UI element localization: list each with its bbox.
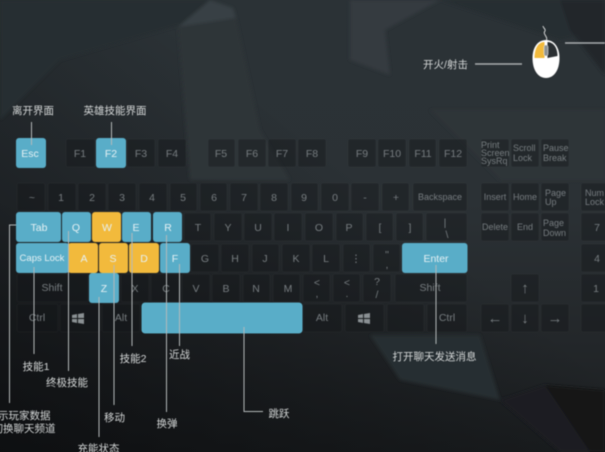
key: Q xyxy=(62,212,91,242)
keyboard: function row: F9 xyxy=(356,148,368,160)
keyboard: shift row: , xyxy=(316,288,318,300)
keyboard: function row: Screen xyxy=(481,148,510,158)
key: F xyxy=(160,243,190,273)
keyboard: shift row: / xyxy=(376,289,379,301)
keyboard: number row: Insert xyxy=(484,192,507,202)
keyboard: shift row: < xyxy=(314,277,320,289)
callout: open chat: 打开聊天发送消息 xyxy=(392,350,476,363)
keyboard: QWERTY row, inactive keys: ] xyxy=(409,222,412,234)
keyboard: QWERTY row, inactive keys: Y xyxy=(224,222,232,234)
keyboard: QWERTY row, inactive keys: I xyxy=(287,222,289,234)
icon: left windows key logo xyxy=(72,313,84,324)
keyboard: home row, inactive keys: , xyxy=(386,259,388,271)
keyboard: shift row xyxy=(17,274,605,302)
keyboard: QWERTY row, inactive keys: Page xyxy=(543,218,564,228)
keyboard: shift row: ↑ xyxy=(521,280,529,297)
keyboard: function row: F4 xyxy=(166,148,178,160)
keyboard: QWERTY row, inactive keys: \ xyxy=(446,229,449,241)
keyboard: shift row: . xyxy=(346,288,348,300)
keyboard: home row, inactive keys: G xyxy=(201,253,209,265)
keyboard: number row: 7 xyxy=(241,192,247,204)
callout: right mouse line xyxy=(565,42,605,44)
key: F: F xyxy=(172,253,178,265)
callout: skill 2 xyxy=(120,233,147,365)
callout: fire xyxy=(423,58,522,71)
key: Caps Lock xyxy=(16,243,69,273)
key: Esc xyxy=(16,138,46,168)
keyboard: function row: F5 xyxy=(215,148,227,160)
keyboard: home row, inactive keys: K xyxy=(292,253,300,265)
callout: ultimate: 终极技能 xyxy=(46,376,88,389)
keyboard: QWERTY row, inactive keys: [ xyxy=(379,222,382,234)
keyboard: number row: Lock xyxy=(585,197,605,207)
keyboard: QWERTY row, inactive keys xyxy=(184,213,605,241)
key: R: R xyxy=(164,222,172,234)
key: E xyxy=(122,212,151,242)
keyboard: function row: F8 xyxy=(306,148,318,160)
key: A: A xyxy=(80,253,88,265)
key: E: E xyxy=(132,222,140,234)
key: S xyxy=(99,243,128,273)
keyboard: shift row: ? xyxy=(374,276,380,288)
keyboard: number row: Home xyxy=(513,192,537,202)
keyboard: function row: Break xyxy=(543,153,567,163)
key: F2 xyxy=(96,138,126,168)
keyboard: home row, inactive keys: " xyxy=(385,249,389,261)
keyboard: shift row: Shift xyxy=(419,282,441,294)
callout: reload: 换弹 xyxy=(156,417,178,430)
keyboard: function row: F12 xyxy=(444,148,462,160)
key: R xyxy=(153,212,182,242)
keyboard: QWERTY row, inactive keys: Down xyxy=(543,228,566,238)
callout: skill 1 xyxy=(23,267,50,373)
keyboard: number row: Up xyxy=(545,197,557,207)
keyboard: home row, inactive keys: L xyxy=(323,253,329,265)
keyboard: number row: 1 xyxy=(58,192,64,204)
callout: open chat xyxy=(392,265,476,363)
keyboard: number row: 0 xyxy=(332,192,338,204)
keyboard: bottom row: → xyxy=(548,310,562,327)
keyboard: home row, inactive keys: J xyxy=(262,253,268,265)
keyboard: function row xyxy=(66,139,569,167)
keyboard: shift row: Shift xyxy=(41,282,63,294)
keyboard: shift row: C xyxy=(162,283,170,295)
callout: skill 1: 技能1 xyxy=(23,360,50,373)
key: Enter: Enter xyxy=(423,253,449,265)
keyboard: number row: Backspace xyxy=(418,192,462,202)
key: W xyxy=(92,212,121,242)
keyboard: bottom row xyxy=(17,304,605,332)
keyboard: bottom row: ↓ xyxy=(521,310,529,327)
callout: move: 移动 xyxy=(104,411,125,424)
keyboard: QWERTY row, inactive keys: | xyxy=(444,217,446,229)
keyboard: number row: 5 xyxy=(180,192,186,204)
callout: tab player data xyxy=(0,225,56,435)
keyboard: QWERTY row, inactive keys: Delete xyxy=(482,222,508,232)
keyboard: function row: F10 xyxy=(383,148,401,160)
keyboard: number row: 6 xyxy=(211,192,217,204)
keyboard: QWERTY row, inactive keys: 7 xyxy=(594,222,600,234)
key: Caps Lock: Caps Lock xyxy=(20,253,65,264)
keyboard: QWERTY row, inactive keys: U xyxy=(254,222,262,234)
key: D xyxy=(129,243,159,273)
keyboard: bottom row: Ctrl xyxy=(439,312,455,324)
keyboard: bottom row: Alt xyxy=(115,312,127,324)
keyboard: function row: F7 xyxy=(276,148,288,160)
keyboard: function row: F6 xyxy=(246,148,258,160)
keyboard: shift row: M xyxy=(284,283,292,295)
keyboard: number row: - xyxy=(363,192,367,204)
callout: melee xyxy=(169,264,190,361)
callout: leave screen xyxy=(12,104,54,145)
callout: leave screen: 离开界面 xyxy=(12,104,54,117)
keyboard: QWERTY row, inactive keys: End xyxy=(517,222,533,232)
keyboard: QWERTY row, inactive keys: P xyxy=(345,222,353,234)
callout: fire: 开火/射击 xyxy=(423,58,468,71)
keyboard: number row xyxy=(17,183,605,211)
key: Tab xyxy=(16,212,61,242)
keyboard: shift row: N xyxy=(252,283,260,295)
keyboard: function row: Scroll xyxy=(513,143,536,153)
key: Z xyxy=(89,273,119,303)
keyboard: number row: 4 xyxy=(149,192,155,204)
keyboard: number row: Num xyxy=(585,188,604,198)
keyboard: QWERTY row, inactive keys: T xyxy=(195,222,202,234)
key: A xyxy=(68,243,98,273)
keyboard: number row: 8 xyxy=(271,192,277,204)
keyboard: function row: Print xyxy=(481,140,500,150)
key: Enter xyxy=(402,243,468,273)
keyboard: number row: 3 xyxy=(119,192,125,204)
keyboard: function row: F11 xyxy=(414,148,432,160)
keyboard: shift row: V xyxy=(192,283,200,295)
keyboard: QWERTY row, inactive keys: O xyxy=(315,222,323,234)
keyboard: home row, inactive keys: 4 xyxy=(594,253,600,265)
keyboard: shift row: 1 xyxy=(593,283,599,295)
callout: hero skills xyxy=(84,104,146,145)
keyboard: home row, inactive keys: ⋮ xyxy=(351,253,361,265)
key: W: W xyxy=(102,222,112,234)
keyboard: home row, inactive keys xyxy=(191,244,605,272)
callout: hero skills: 英雄技能界面 xyxy=(84,104,146,117)
keyboard: function row: Pause xyxy=(543,143,569,153)
callout: melee: 近战 xyxy=(169,348,190,361)
keyboard: home row, inactive keys: H xyxy=(231,253,239,265)
icon: right windows key logo xyxy=(358,313,370,324)
keyboard: number row: + xyxy=(393,192,399,204)
keyboard: bottom row: ← xyxy=(488,310,502,327)
keyboard: bottom row: Ctrl xyxy=(29,312,45,324)
key: Tab: Tab xyxy=(31,222,48,234)
key: Q: Q xyxy=(72,222,80,234)
keyboard: function row: F3 xyxy=(135,148,147,160)
key: space bar xyxy=(142,303,302,333)
keyboard: function row: SysRq xyxy=(481,156,508,166)
callout: jump: 跳跃 xyxy=(268,407,290,420)
keyboard: number row: ~ xyxy=(29,192,35,204)
key: S: S xyxy=(109,253,117,265)
keyboard: number row: Page xyxy=(545,188,566,198)
key: D: D xyxy=(140,253,148,265)
key: Z: Z xyxy=(101,283,108,295)
key: F2: F2 xyxy=(105,148,117,160)
icon: mouse xyxy=(532,26,560,78)
keyboard: function row: F1 xyxy=(74,148,86,160)
keyboard: shift row: < xyxy=(344,277,350,289)
callout: jump xyxy=(244,327,290,420)
keyboard: number row: 2 xyxy=(89,192,95,204)
key: Esc: Esc xyxy=(21,148,39,160)
keyboard: function row: Lock xyxy=(513,153,533,163)
keyboard: shift row: X xyxy=(131,283,139,295)
keyboard: shift row: B xyxy=(222,283,230,295)
callout: skill 2: 技能2 xyxy=(120,352,147,365)
keyboard: number row: 9 xyxy=(301,192,307,204)
keyboard: bottom row: Alt xyxy=(316,312,328,324)
